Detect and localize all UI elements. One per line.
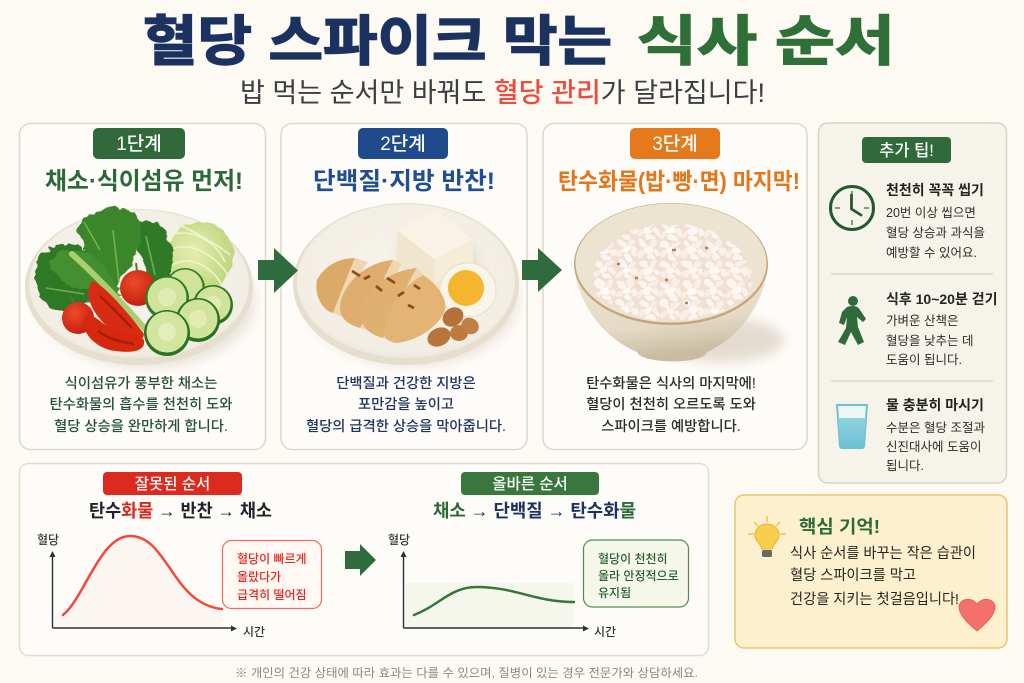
- tip: drink water: 신진대사에 도움이: [886, 440, 981, 454]
- chart: blood sugar spike: 시간: [243, 625, 265, 639]
- tip: chew slowly: 예방할 수 있어요.: [886, 246, 977, 260]
- panel: step 3 carbohydrate: [543, 124, 807, 450]
- text: step 3 description: 혈당이 천천히 오르도록 도와: [586, 396, 756, 413]
- badge: step 2: [358, 128, 448, 159]
- text: step 3 description: 탄수화물은 식사의 마지막에!: [586, 375, 756, 392]
- text: step 3 description: [586, 375, 756, 435]
- tip: drink water: [886, 397, 985, 473]
- text: key message: 혈당 스파이크를 막고: [790, 567, 916, 584]
- text: step 2 description: 단백질과 건강한 지방은: [336, 375, 476, 392]
- arrow: step 1 to step 2: [258, 248, 298, 293]
- text: step 2 description: 포만감을 높이고: [358, 396, 454, 413]
- text: step 2 description: [306, 375, 506, 435]
- badge: step 2: 2단계: [380, 133, 426, 155]
- tip: walking after meal: 식후 10~20분 걷기: [886, 291, 998, 307]
- callout: rapid rise and fall: 혈당이 빠르게: [237, 552, 307, 566]
- tip: chew slowly: 20번 이상 씹으면: [886, 206, 976, 220]
- heading: step 3: 탄수화물(밥·빵·면) 마지막!: [558, 168, 800, 194]
- icon: heart: [959, 599, 995, 631]
- panel: extra tips: [818, 123, 1006, 483]
- badge: correct order: 올바른 순서: [492, 475, 568, 493]
- icon: clock: [830, 186, 874, 230]
- callout: rapid rise and fall: 올랐다가: [237, 570, 281, 584]
- arrow: wrong to right: [345, 544, 376, 576]
- tip: drink water: 됩니다.: [886, 459, 924, 473]
- arrow: step 2 to step 3: [522, 248, 562, 292]
- title: [143, 12, 895, 72]
- callout: rapid rise and fall: [222, 540, 322, 608]
- text: key message: 건강을 지키는 첫걸음입니다!: [790, 591, 959, 608]
- badge: step 1: 1단계: [116, 133, 162, 155]
- badge: correct order: [461, 472, 599, 495]
- callout: gradual and stable: 유지됨: [598, 586, 631, 600]
- icon: walking person: [838, 296, 866, 345]
- text: wrong order sequence: 탄수화물 → 반찬 → 채소: [89, 501, 272, 521]
- text: step 1 description: 혈당 상승을 완만하게 합니다.: [54, 418, 228, 435]
- chart: stable blood sugar: 시간: [594, 625, 616, 639]
- tip: walking after meal: [886, 291, 998, 367]
- panel: key takeaway: [735, 495, 1007, 648]
- badge: extra tips: 추가 팁!: [879, 141, 934, 160]
- text: correct order sequence: 채소 → 단백질 → 탄수화물: [433, 501, 636, 521]
- heading: key memory: 핵심 기억!: [799, 517, 880, 537]
- callout: gradual and stable: 올라 안정적으로: [598, 569, 679, 583]
- footnote: ※ 개인의 건강 상태에 따라 효과는 다를 수 있으며, 질병이 있는 경우 전문가와 상담하세요.: [235, 666, 698, 680]
- text: step 2 description: 혈당의 급격한 상승을 막아줍니다.: [306, 418, 506, 435]
- tip: walking after meal: 가벼운 산책은: [886, 313, 958, 328]
- tip: chew slowly: 천천히 꼭꼭 씹기: [886, 182, 984, 198]
- callout: rapid rise and fall: 급격히 떨어짐: [237, 588, 307, 602]
- badge: step 3: 3단계: [652, 133, 698, 155]
- chart: blood sugar spike: [37, 533, 265, 639]
- panel: blood sugar comparison: [20, 464, 708, 656]
- title: 혈당 스파이크 막는: [143, 12, 612, 72]
- illustration: rice bowl: [574, 203, 784, 362]
- badge: wrong order: [103, 472, 242, 495]
- heading: step 1: 채소·식이섬유 먼저!: [45, 168, 243, 195]
- chart: stable blood sugar: 혈당: [388, 533, 410, 547]
- heading: step 2: 단백질·지방 반찬!: [313, 168, 495, 195]
- tip: drink water: 수분은 혈당 조절과: [886, 421, 985, 435]
- badge: step 3: [630, 128, 720, 159]
- panel: step 2 protein: [281, 124, 527, 450]
- text: key message: 식사 순서를 바꾸는 작은 습관이: [790, 545, 976, 562]
- icon: glass of water: [837, 405, 867, 448]
- tip: chew slowly: [886, 182, 985, 260]
- illustration: vegetable plate: [25, 207, 255, 368]
- text: step 1 description: 탄수화물의 흡수를 천천히 도와: [50, 396, 232, 413]
- text: step 1 description: [50, 375, 232, 435]
- tip: chew slowly: 혈당 상승과 과식을: [886, 226, 985, 240]
- panel: step 1 vegetables: [20, 124, 266, 450]
- badge: step 1: [93, 128, 185, 159]
- callout: gradual and stable: 혈당이 천천히: [598, 551, 668, 566]
- subtitle: 밥 먹는 순서만 바꿔도 혈당 관리가 달라집니다!: [240, 78, 765, 108]
- icon: light bulb: [748, 516, 786, 557]
- illustration: protein plate: [293, 203, 519, 366]
- text: key message: [790, 545, 976, 608]
- text: step 3 description: 스파이크를 예방합니다.: [601, 418, 741, 435]
- title: 식사 순서: [637, 12, 895, 72]
- chart: blood sugar spike: 혈당: [37, 533, 59, 547]
- tip: walking after meal: 도움이 됩니다.: [886, 353, 962, 367]
- badge: wrong order: 잘못된 순서: [135, 475, 210, 493]
- tip: drink water: 물 충분히 마시기: [886, 397, 984, 413]
- tip: walking after meal: 혈당을 낮추는 데: [886, 334, 973, 348]
- callout: gradual and stable: [584, 540, 688, 607]
- badge: extra tips: [862, 137, 951, 163]
- chart: stable blood sugar: [388, 533, 616, 639]
- text: step 1 description: 식이섬유가 풍부한 채소는: [65, 375, 217, 392]
